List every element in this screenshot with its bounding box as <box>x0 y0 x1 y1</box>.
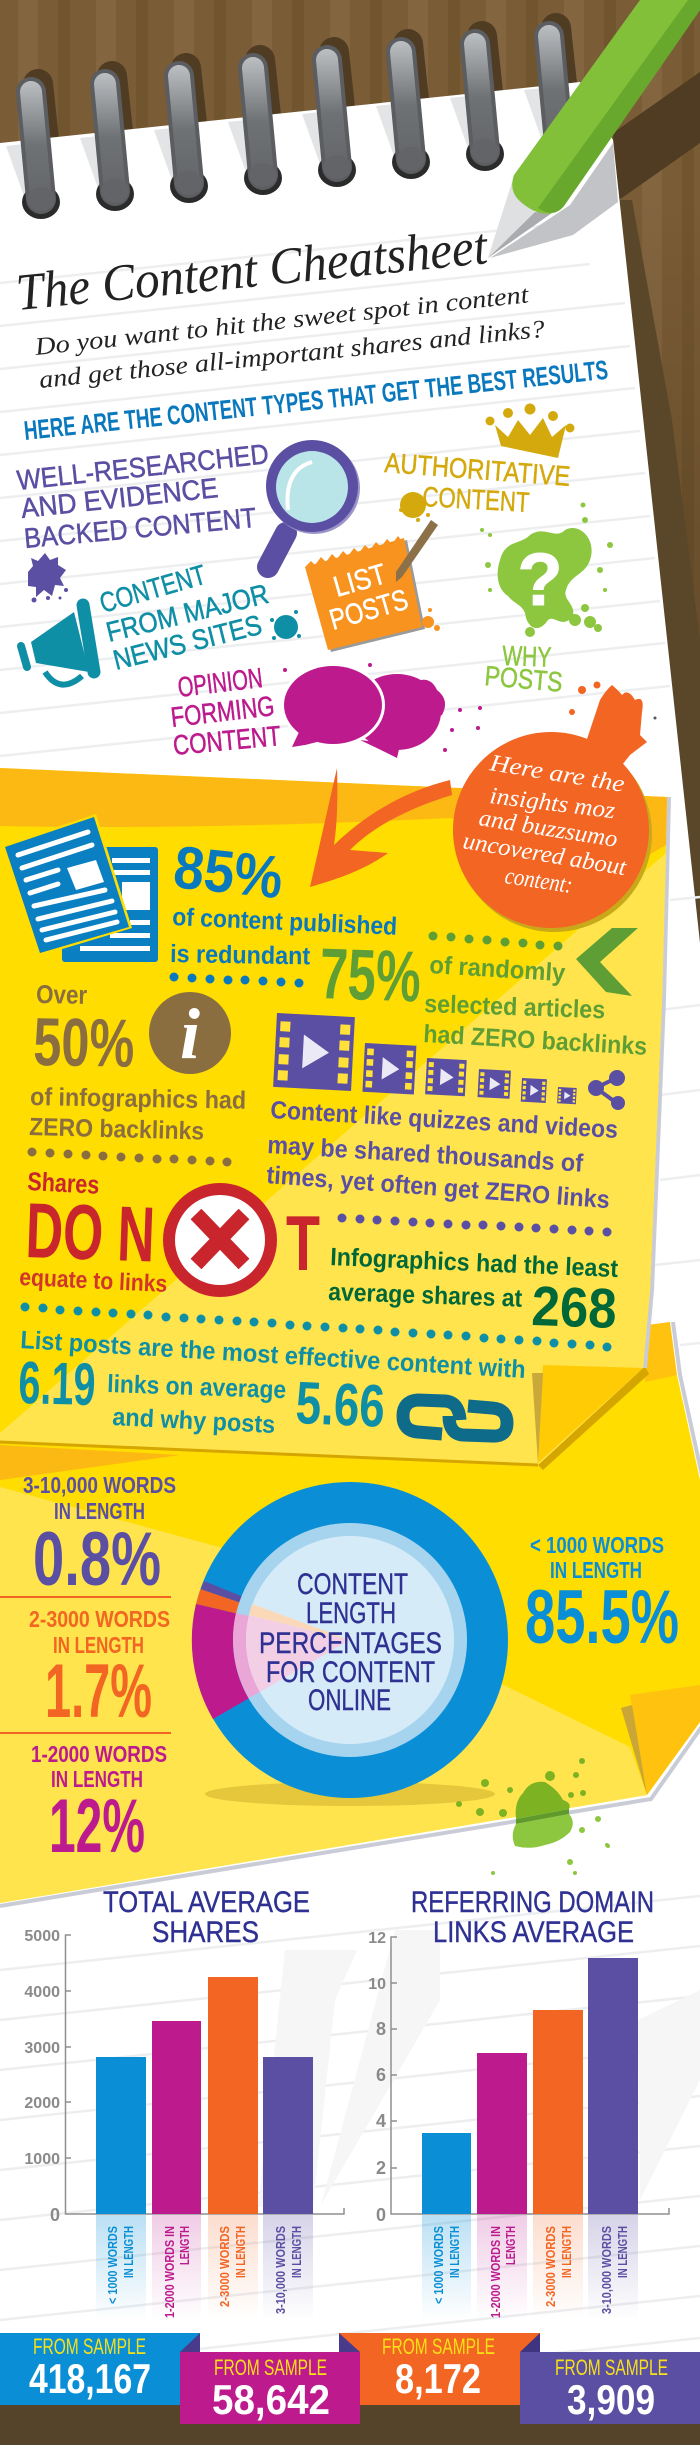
stat: 1-2000 words: IN LENGTH <box>51 1766 143 1792</box>
spiral ring 7 <box>466 44 504 171</box>
ribbon: orange sample <box>339 2333 540 2405</box>
stat: quizzes and videos: Content like quizzes and videos <box>270 1096 619 1144</box>
ribbon: blue sample: 418,167 <box>29 2355 151 2402</box>
stat: infographics least shares <box>328 1243 619 1340</box>
content type: well-researched: BACKED CONTENT <box>23 502 258 554</box>
bar chart: referring domain links: 2-3000 WORDS <box>543 2226 558 2307</box>
intro text <box>33 281 547 394</box>
stat: list posts links: links on average <box>107 1370 287 1404</box>
stat: infographics least shares: Infographics had the least <box>330 1243 619 1283</box>
ribbon: purple sample: 3,909 <box>567 2376 655 2423</box>
stat: 75% zero backlinks: selected articles <box>424 990 606 1024</box>
bar chart: total average shares: 4000 <box>24 1984 60 2001</box>
content type: major news sites: FROM MAJOR <box>103 578 272 648</box>
stat: list posts links: 5.66 <box>294 1369 386 1440</box>
callout: orange splat <box>453 682 656 932</box>
bar chart: total average shares: 5000 <box>24 1928 60 1945</box>
bar chart: total average shares <box>24 1928 344 2320</box>
ribbon: magenta sample: 58,642 <box>212 2376 330 2423</box>
stat: shares do not equate to links: equate to links <box>19 1264 168 1298</box>
content type: opinion forming <box>169 662 282 761</box>
donut centre text: ONLINE <box>308 1684 391 1717</box>
bar chart: total average shares: 2-3000 WORDS <box>217 2226 232 2307</box>
first yellow note <box>0 768 667 1465</box>
stat: 50% infographics: of infographics had <box>30 1083 246 1115</box>
stat: under 1000 words: < 1000 WORDS <box>530 1532 664 1558</box>
arrow <box>310 768 452 887</box>
donut centre text: CONTENT <box>297 1568 408 1601</box>
donut shadow <box>205 1782 495 1806</box>
icon: list posts note <box>305 520 440 652</box>
stat: infographics least shares: average shares at <box>328 1278 523 1313</box>
divider <box>0 1732 171 1734</box>
content type: well-researched: AND EVIDENCE <box>19 472 220 524</box>
intro text: Do you want to hit the sweet spot in content <box>33 281 531 361</box>
bar chart: referring domain links: 8 <box>376 2019 386 2039</box>
content type: opinion forming: CONTENT <box>172 720 282 761</box>
icon: chain link <box>403 1400 507 1436</box>
splat: green <box>456 1758 610 1875</box>
icon: newspapers <box>3 814 158 962</box>
icon: magnifying glass <box>266 440 360 567</box>
stat: list posts links: List posts are the most effective content with <box>20 1326 526 1384</box>
bar chart: referring domain links: 12 <box>368 1930 386 1947</box>
stat: infographics least shares: 268 <box>531 1274 618 1340</box>
stat: 1-2000 words <box>31 1741 167 1869</box>
title: The Content Cheatsheet <box>14 218 491 322</box>
bar chart: referring domain links: 4 <box>376 2111 386 2131</box>
stat: 85% redundant: of content published <box>172 903 398 941</box>
spiral ring 5 <box>318 60 356 187</box>
chart heading: total average shares: SHARES <box>152 1916 259 1949</box>
donut chart <box>192 1482 508 1798</box>
stat: quizzes and videos: may be shared thousands of <box>267 1131 584 1178</box>
ring shadows on paper <box>6 88 550 198</box>
stat: 75% zero backlinks: had ZERO backlinks <box>423 1020 648 1061</box>
content type: authoritative: CONTENT <box>422 481 530 518</box>
bar chart: total average shares: < 1000 WORDS <box>105 2226 120 2304</box>
bar chart: referring domain links: IN LENGTH <box>447 2226 462 2278</box>
content type: well-researched: WELL-RESEARCHED <box>15 438 270 496</box>
bar chart: total average shares: 2000 <box>24 2095 60 2112</box>
bar chart: referring domain links: LENGTH <box>503 2226 518 2265</box>
donut centre text: PERCENTAGES <box>259 1627 442 1660</box>
chart heading: total average shares: TOTAL AVERAGE <box>103 1886 310 1919</box>
ribbon: purple sample <box>520 2352 700 2424</box>
callout: orange splat: uncovered about <box>461 828 629 881</box>
stat: 3-10,000 words <box>23 1472 176 1602</box>
stat: 50% infographics <box>29 979 246 1146</box>
icon: info: i <box>180 994 200 1074</box>
icon: share <box>588 1070 625 1110</box>
spiral ring 4 <box>244 68 282 195</box>
stat: 3-10,000 words: 0.8% <box>33 1517 161 1602</box>
bar chart: total average shares: IN LENGTH <box>233 2226 248 2278</box>
content type: major news sites <box>96 559 272 676</box>
splat: teal <box>270 610 301 640</box>
bar chart: total average shares: LENGTH <box>177 2226 192 2265</box>
divider <box>0 1596 171 1598</box>
spiral ring 1 <box>22 92 60 219</box>
second yellow note <box>0 1322 700 1903</box>
stat: under 1000 words <box>525 1532 679 1660</box>
callout: orange splat: content: <box>503 863 574 899</box>
ribbon: magenta sample <box>180 2352 360 2424</box>
dots teal <box>20 1302 612 1352</box>
splat: why posts question mark: ? <box>517 538 563 621</box>
donut centre text <box>259 1568 442 1717</box>
stat: shares do not equate to links <box>19 1166 320 1298</box>
stat: quizzes and videos <box>266 1096 619 1214</box>
bar chart: total average shares: 0 <box>50 2205 60 2225</box>
splat: why posts question mark <box>480 502 613 637</box>
dots brown <box>28 1148 232 1166</box>
pencil shadow on desk <box>613 72 700 200</box>
stat: 85% redundant: 85% <box>171 833 286 911</box>
stat: 50% infographics: 50% <box>33 1004 135 1082</box>
intro text: and get those all-important shares and links? <box>38 316 547 394</box>
spiral ring 8 <box>540 36 578 163</box>
ribbon: orange sample: FROM SAMPLE <box>382 2334 495 2359</box>
paper shadow on desk <box>619 200 700 943</box>
content type: opinion forming: OPINION <box>176 662 264 703</box>
ring shadows on desk <box>38 28 562 140</box>
stat: shares do not equate to links: Shares <box>27 1166 100 1200</box>
pale chart backdrop shapes <box>258 1930 700 2207</box>
stat: 2-3000 words <box>29 1606 170 1734</box>
spiral ring 3 <box>170 76 208 203</box>
spiral ring 6 <box>392 52 430 179</box>
bar chart: total average shares: IN LENGTH <box>121 2226 136 2278</box>
bar chart: referring domain links: 0 <box>376 2205 386 2225</box>
donut centre text: LENGTH <box>306 1597 396 1630</box>
icon: megaphone <box>21 605 94 685</box>
first note edge shadow <box>645 797 669 1368</box>
stat: under 1000 words: IN LENGTH <box>550 1557 642 1583</box>
ribbon: blue sample <box>0 2333 200 2405</box>
stat: 50% infographics: ZERO backlinks <box>29 1113 205 1146</box>
callout: orange splat: insights moz <box>488 783 617 824</box>
content type: authoritative <box>384 447 571 518</box>
stat: 3-10,000 words: IN LENGTH <box>54 1498 145 1524</box>
callout: orange splat: and buzzsumo <box>477 805 619 853</box>
ribbon: blue sample: FROM SAMPLE <box>33 2334 146 2359</box>
bar chart: referring domain links: IN LENGTH <box>615 2226 630 2278</box>
stat: 2-3000 words: 2-3000 WORDS <box>29 1606 170 1632</box>
stat: 3-10,000 words: 3-10,000 WORDS <box>23 1472 176 1498</box>
ribbon: magenta sample: FROM SAMPLE <box>214 2355 327 2380</box>
footer: desk strip <box>0 2405 700 2445</box>
stat: 75% zero backlinks: of randomly <box>429 951 566 987</box>
bar chart: total average shares: 1-2000 WORDS IN <box>162 2226 177 2318</box>
content type: well-researched <box>15 438 270 554</box>
bar chart: total average shares: IN LENGTH <box>289 2226 304 2278</box>
dots purple <box>338 1214 612 1236</box>
bar chart: referring domain links <box>368 1930 669 2320</box>
dots green <box>428 932 562 950</box>
stat: list posts links <box>18 1326 526 1440</box>
bar chart: referring domain links: 6 <box>376 2065 386 2085</box>
bar chart: referring domain links: IN LENGTH <box>559 2226 574 2278</box>
content type: major news sites: CONTENT <box>96 559 209 619</box>
stat: 75% zero backlinks <box>318 934 648 1061</box>
stat: shares do not equate to links: T <box>286 1199 320 1287</box>
content type: why posts <box>483 640 564 698</box>
dots blue <box>170 972 304 988</box>
splat: gold <box>399 492 434 530</box>
stat: shares do not equate to links: DO N <box>24 1186 156 1278</box>
content type: opinion forming: FORMING <box>169 690 276 733</box>
stat: 2-3000 words: 1.7% <box>45 1649 152 1734</box>
background: wooden desk <box>0 0 700 1000</box>
icon: list posts note: LIST <box>330 558 390 604</box>
icon: list posts note: POSTS <box>326 584 412 637</box>
bar chart: referring domain links: 2 <box>376 2158 386 2178</box>
content type: why posts: WHY <box>502 640 552 673</box>
chart heading: referring domain links: LINKS AVERAGE <box>433 1916 634 1949</box>
ribbon: orange sample: 8,172 <box>395 2355 481 2402</box>
bar chart: total average shares: 3000 <box>24 2040 60 2057</box>
desk darkening on right <box>605 200 700 1000</box>
stat: 75% zero backlinks: 75% <box>318 934 422 1018</box>
donut centre text: FOR CONTENT <box>266 1656 435 1689</box>
stat: 1-2000 words: 1-2000 WORDS <box>31 1741 167 1767</box>
bar chart: referring domain links: < 1000 WORDS <box>431 2226 446 2304</box>
stat: 50% infographics: Over <box>36 979 87 1010</box>
icon: info <box>149 992 231 1074</box>
icon: green pencil <box>488 0 700 258</box>
splat: purple <box>28 553 68 602</box>
callout: orange splat: Here are the <box>487 750 627 798</box>
icons: film strips <box>273 1013 577 1104</box>
stat: 1-2000 words: 12% <box>49 1784 145 1869</box>
chart heading: total average shares <box>103 1886 310 1949</box>
stat: 85% redundant: is redundant <box>170 940 311 970</box>
spiral ring 2 <box>96 84 134 211</box>
bar chart: referring domain links: 1-2000 WORDS IN <box>488 2226 503 2318</box>
icon: crown <box>486 404 574 458</box>
stat: list posts links: and why posts <box>112 1403 276 1439</box>
bar chart: total average shares: 1000 <box>24 2151 60 2168</box>
second note edge shadow <box>0 1322 700 1906</box>
content type: why posts: POSTS <box>483 660 564 698</box>
stat: quizzes and videos: times, yet often get ZERO links <box>266 1161 611 1214</box>
chart heading: referring domain links <box>411 1886 654 1949</box>
bar chart: referring domain links: 10 <box>368 1976 386 1993</box>
bar chart: referring domain links: 3-10,000 WORDS <box>599 2226 614 2314</box>
stat: 85% redundant <box>170 833 398 970</box>
icon: speech bubbles <box>281 663 482 758</box>
icon: chevron <box>576 928 638 996</box>
content type: major news sites: NEWS SITES <box>110 609 265 676</box>
stat: 2-3000 words: IN LENGTH <box>53 1632 144 1658</box>
content type: authoritative: AUTHORITATIVE <box>384 447 571 492</box>
bar chart: total average shares: 3-10,000 WORDS <box>273 2226 288 2314</box>
stat: list posts links: 6.19 <box>18 1349 96 1418</box>
